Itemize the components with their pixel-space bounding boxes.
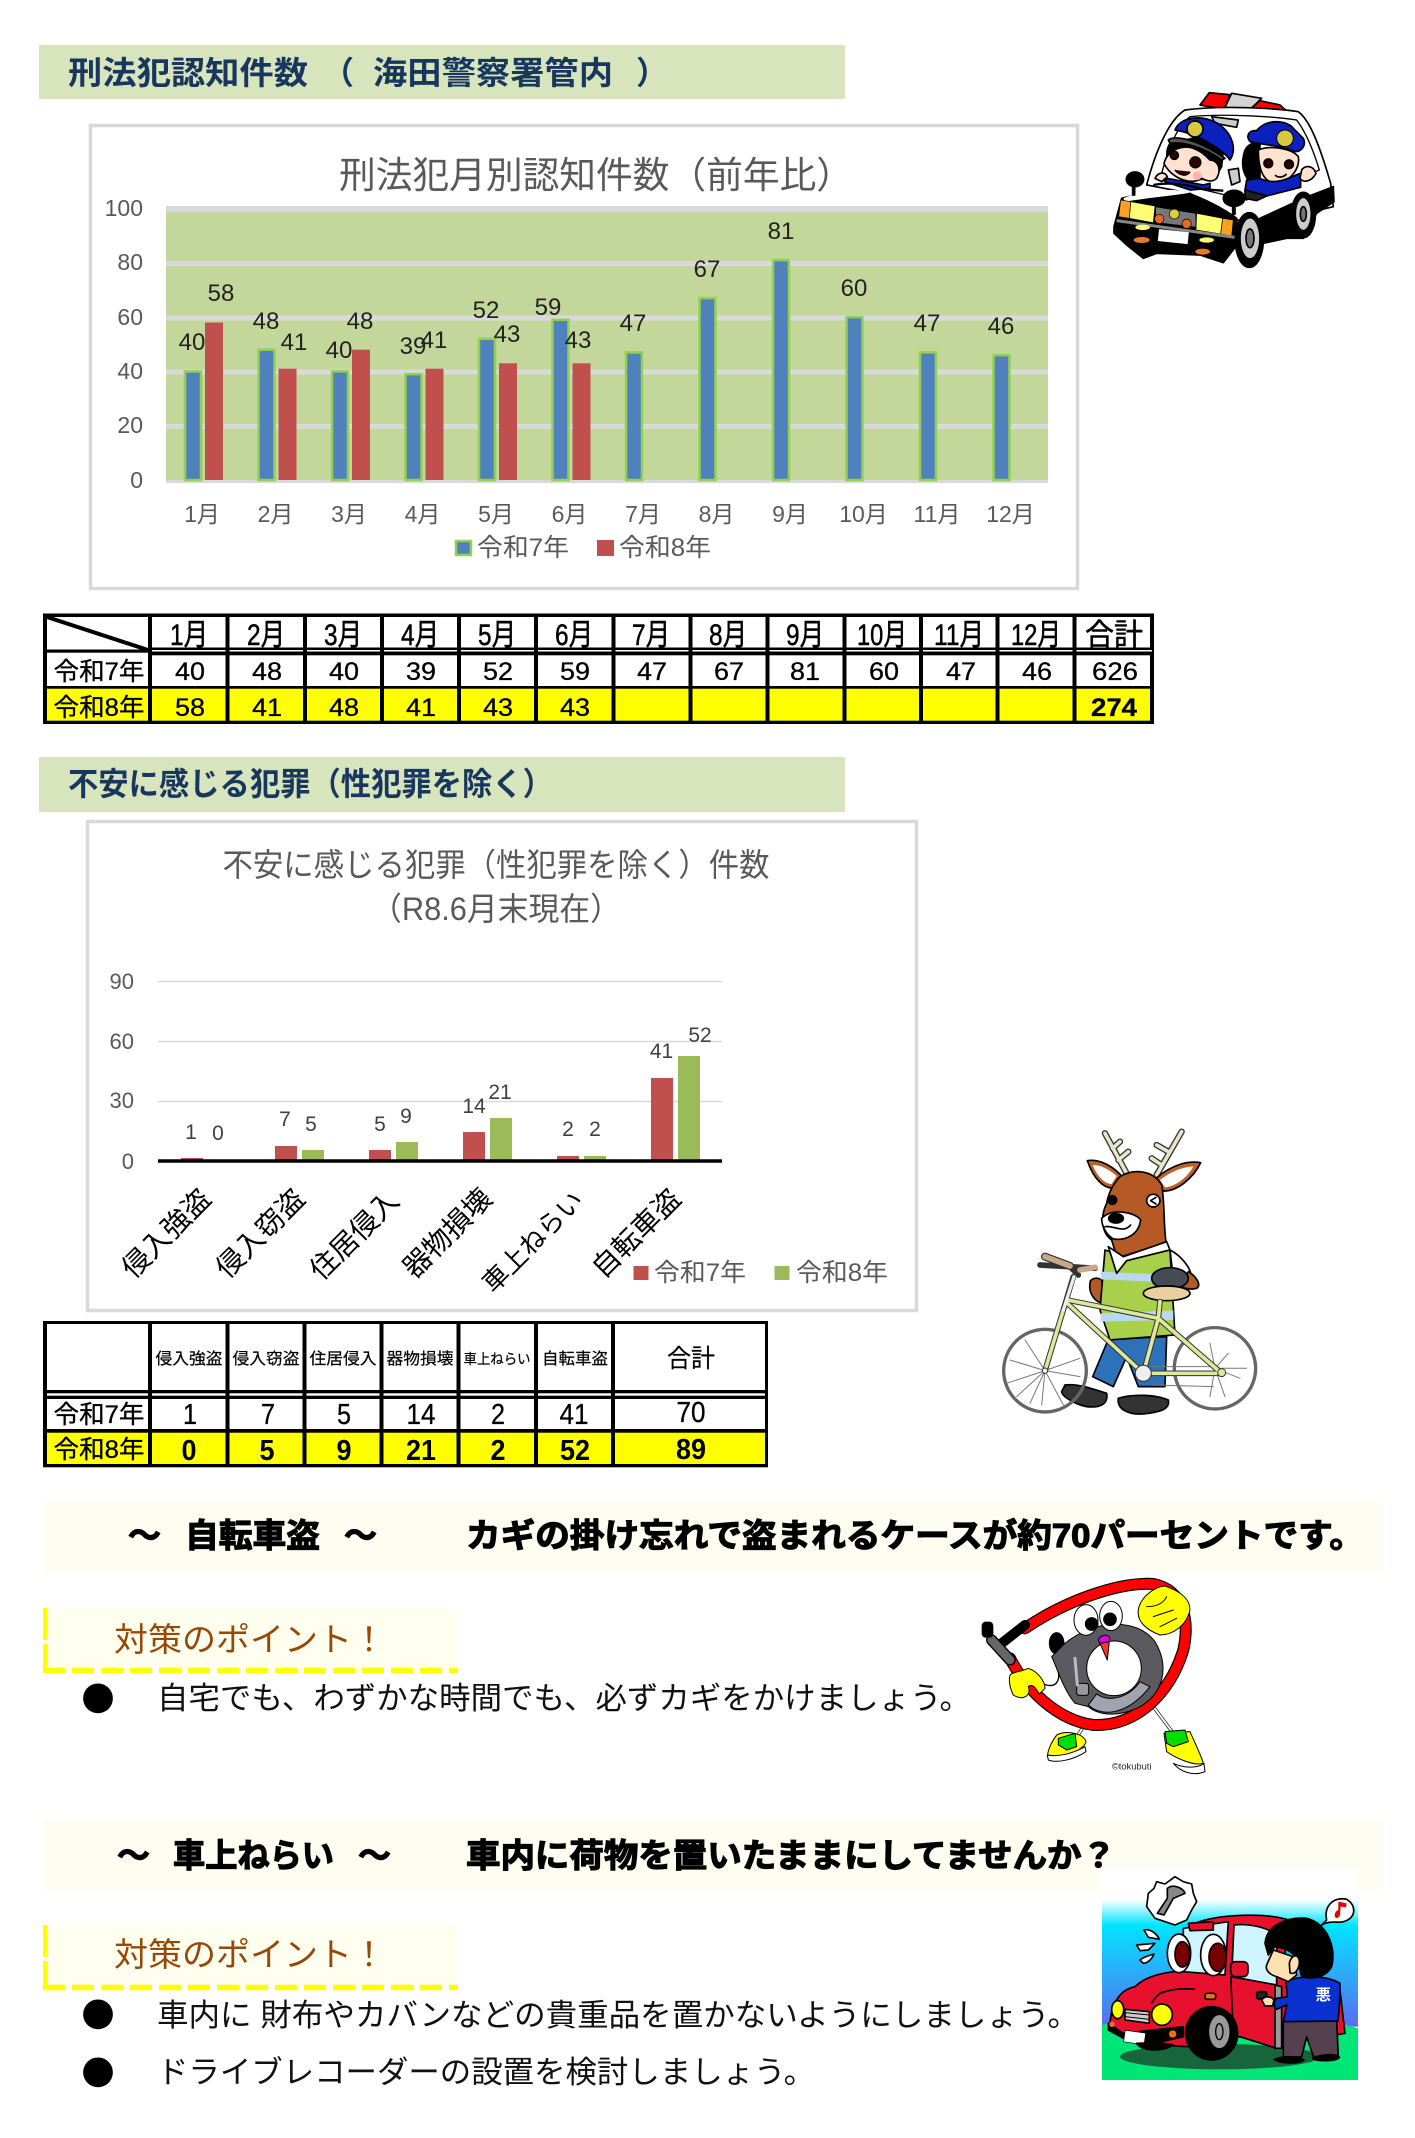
table row: 令和8年: 48 [329, 694, 359, 722]
table row: 令和7年: 40 [329, 658, 359, 686]
table header labels: 合計 [667, 1345, 715, 1373]
table row: 令和7年: 5 [337, 1399, 351, 1431]
icon: police car with two officers [1114, 93, 1334, 267]
plot area with bars [166, 209, 1048, 482]
month labels: 7月 [625, 501, 661, 527]
panel: monthly bar chart [90, 126, 1078, 588]
data labels: 67 [694, 256, 720, 283]
icon: deer mascot with bicycle [1004, 1132, 1256, 1414]
table row: 令和7年: 46 [1022, 658, 1052, 686]
bullet text: 貴重品 [82, 1989, 1079, 2037]
table row: 令和7年: 41 [560, 1399, 588, 1431]
y axis labels [110, 969, 134, 1174]
callout: 対策のポイント 1 [43, 1608, 458, 1670]
data labels: 41 [281, 329, 307, 356]
heading band: 刑法犯認知件数: （ [322, 55, 354, 91]
table row: 令和8年: 41 [406, 694, 436, 722]
data labels: 47 [620, 310, 646, 337]
table header months: 2月 [247, 619, 285, 652]
table row: 令和7年: 40 [175, 658, 205, 686]
table row: 令和7年: 14 [406, 1399, 436, 1431]
section band: 車上ねらい: ～ [117, 1837, 150, 1874]
bullet text: カギ [82, 1673, 971, 1721]
data labels: 43 [494, 321, 520, 348]
table row: 令和8年: 41 [252, 694, 282, 722]
month labels: 5月 [478, 501, 514, 527]
section band: 自転車盗: 自転車盗 [185, 1517, 320, 1554]
y axis labels: 100 [105, 195, 143, 221]
y axis labels: 90 [110, 969, 134, 994]
data labels: 47 [914, 310, 940, 337]
y axis labels [105, 195, 143, 493]
table row: 令和7年: 令和7年 [54, 1401, 144, 1429]
data labels: 41 [650, 1040, 673, 1063]
table row: 令和7年: 81 [790, 658, 820, 686]
heading band: 刑法犯認知件数: ） [636, 55, 668, 91]
table row: 令和8年 [54, 694, 1137, 722]
y axis labels: 20 [117, 412, 143, 438]
rotated category labels: 住居侵入 [304, 1185, 405, 1286]
bullet text: 貴重品: ● [82, 1989, 114, 2037]
table row: 令和8年: 52 [560, 1435, 590, 1467]
section band: 自転車盗 [43, 1502, 1383, 1572]
table row: 令和8年: 43 [560, 694, 590, 722]
table row: 令和7年: 令和7年 [54, 658, 144, 686]
chart title [222, 847, 770, 927]
table header months: 11月 [934, 619, 984, 652]
data labels [179, 218, 1014, 364]
month labels: 6月 [552, 501, 587, 527]
data labels: 40 [179, 329, 205, 356]
data labels: 59 [535, 294, 561, 321]
table header labels: 侵入窃盗 [232, 1350, 300, 1368]
data labels: 52 [688, 1024, 712, 1047]
data labels: 60 [841, 275, 867, 302]
table header months: 9月 [786, 619, 824, 652]
chart title: 刑法犯月別認知件数（前年比） [339, 155, 853, 196]
table header labels: 器物損壊 [386, 1350, 454, 1368]
chart frame [88, 822, 916, 1310]
legend: 令和8年 [619, 534, 711, 562]
month labels: 8月 [699, 501, 734, 527]
data labels: 14 [462, 1095, 486, 1118]
section band: 車上ねらい: 車上ねらい [173, 1837, 334, 1874]
table row: 令和7年: 60 [869, 658, 899, 686]
data labels: 21 [488, 1081, 512, 1104]
data labels: 58 [208, 280, 234, 307]
month labels: 9月 [772, 501, 808, 527]
rotated category labels: 自転車盗 [586, 1183, 687, 1284]
table header months: 合計 [1085, 619, 1143, 652]
table header months: 6月 [555, 619, 593, 652]
y axis labels: 0 [130, 467, 143, 493]
table header months [170, 619, 1143, 652]
month labels: 1月 [184, 501, 220, 527]
data labels: 40 [326, 337, 352, 364]
rotated category labels [116, 1183, 687, 1298]
bullet text: 貴重品: 車内に 財布やカバンなどの貴重品を置かないようにしましょう。 [157, 1998, 1079, 2033]
table header labels: 住居侵入 [310, 1350, 376, 1368]
heading band: 不安に感じる犯罪 [39, 757, 845, 812]
rotated category labels: 車上ねらい [476, 1185, 589, 1298]
bullet text: ドライブレコーダー: ● [82, 2047, 114, 2095]
table header months: 7月 [632, 619, 670, 652]
chart title: （R8.6月末現在） [371, 891, 621, 927]
table row: 令和7年: 59 [560, 658, 590, 686]
table row: 令和7年: 48 [252, 658, 282, 686]
icon: car break-in illustration: 悪 [1316, 1987, 1331, 2004]
table row: 令和8年: 5 [260, 1435, 274, 1467]
month labels: 3月 [331, 501, 367, 527]
month labels: 10月 [839, 501, 888, 527]
month labels: 11月 [914, 501, 960, 527]
icon: bicycle lock character: ©tokubuti [1112, 1761, 1151, 1771]
y axis labels: 40 [117, 358, 143, 384]
data labels: 46 [988, 313, 1014, 340]
table row: 令和8年: 令和8年 [54, 1436, 144, 1464]
rotated category labels: 侵入強盗 [116, 1183, 217, 1284]
y axis labels: 0 [122, 1149, 134, 1174]
table row: 令和8年: 9 [336, 1435, 352, 1467]
data labels: 43 [565, 327, 591, 354]
table header months: 4月 [401, 619, 439, 652]
legend: 令和8年 [796, 1259, 888, 1287]
table row: 令和8年: 43 [483, 694, 513, 722]
callout: 対策のポイント 2 [43, 1925, 458, 1988]
data labels: 48 [347, 308, 373, 335]
table row: 令和8年 [54, 1434, 706, 1467]
bullet text: ドライブレコーダー: ドライブレコーダーの設置を検討しましょう。 [157, 2055, 815, 2090]
table row: 令和7年: 52 [483, 658, 513, 686]
y axis labels: 80 [117, 249, 143, 275]
data labels [185, 1024, 712, 1145]
rotated category labels: 侵入窃盗 [210, 1183, 311, 1284]
table row: 令和7年: 67 [714, 658, 744, 686]
y axis labels: 60 [110, 1029, 134, 1054]
table header months: 12月 [1011, 619, 1061, 652]
y axis labels: 60 [117, 304, 143, 330]
section band: 自転車盗: ～ [344, 1517, 377, 1554]
chart title: 不安に感じる犯罪（性犯罪を除く）件数 [222, 847, 770, 883]
table row: 令和8年: 令和8年 [54, 694, 144, 722]
table row: 令和7年 [54, 658, 1138, 686]
data labels: 9 [400, 1105, 412, 1128]
month labels: 12月 [986, 501, 1035, 527]
data labels: 39 [400, 333, 426, 360]
table row: 令和7年: 626 [1092, 658, 1138, 686]
table row: 令和7年: 2 [491, 1399, 505, 1431]
section band: 自転車盗: ～ [128, 1517, 161, 1554]
y axis labels: 30 [110, 1088, 134, 1113]
table row: 令和7年: 47 [637, 658, 667, 686]
table row: 令和8年: 2 [490, 1435, 506, 1467]
table row: 令和8年: 21 [406, 1435, 436, 1467]
section band: 車上ねらい: ～ [358, 1837, 391, 1874]
heading band: 不安に感じる犯罪: 不安に感じる犯罪（性犯罪を除く） [68, 766, 553, 802]
heading band: 刑法犯認知件数: 刑法犯認知件数 [68, 55, 308, 91]
legend: 令和7年 [654, 1259, 746, 1287]
legend [456, 534, 711, 562]
section band: 車上ねらい [43, 1821, 1383, 1890]
table header labels: 侵入強盗 [156, 1350, 222, 1368]
table row: 令和7年: 1 [183, 1399, 197, 1431]
data labels: 7 [279, 1108, 291, 1131]
table row: 令和8年: 89 [676, 1434, 706, 1466]
chart frame [90, 126, 1078, 588]
rotated category labels: 器物損壊 [397, 1183, 498, 1284]
bars [158, 1056, 722, 1161]
bullet text: カギ: ● [82, 1673, 114, 1721]
legend: 令和7年 [477, 534, 569, 562]
data labels: 2 [589, 1118, 601, 1141]
table header months: 1月 [170, 619, 208, 652]
data table: monthly counts [43, 614, 1154, 724]
bullet text: カギ: 自宅でも、わずかな時間でも、必ずカギをかけましょう。 [157, 1681, 971, 1716]
bullet text: ドライブレコーダー [82, 2047, 815, 2095]
heading band: 刑法犯認知件数 [39, 45, 845, 99]
table header months: 10月 [857, 619, 907, 652]
table header months: 5月 [478, 619, 516, 652]
table row: 令和8年: 58 [175, 694, 205, 722]
gridlines and axis [158, 982, 722, 1102]
table row: 令和7年: 47 [946, 658, 976, 686]
section band: 自転車盗: カギの掛け忘れで盗まれるケースが約70パーセントです。 [466, 1517, 1364, 1554]
table header labels: 車上ねらい [464, 1351, 530, 1367]
table row: 令和7年: 70 [676, 1397, 706, 1429]
table header labels [156, 1345, 715, 1373]
data labels: 81 [768, 218, 794, 245]
table row: 令和7年 [54, 1397, 706, 1431]
legend [634, 1259, 888, 1287]
data labels: 41 [421, 327, 447, 354]
data labels: 48 [253, 308, 279, 335]
data labels: 5 [305, 1113, 317, 1136]
table row: 令和8年: 274 [1091, 694, 1137, 722]
icon: bicycle lock character [982, 1584, 1205, 1774]
table row: 令和7年: 39 [406, 658, 436, 686]
table header months: 3月 [324, 619, 362, 652]
icon: car break-in illustration [1102, 1868, 1358, 2080]
callout: 対策のポイント 1: 対策のポイント！ [114, 1621, 386, 1658]
table row: 令和8年: 0 [182, 1435, 196, 1467]
data labels: 0 [212, 1122, 224, 1145]
heading band: 刑法犯認知件数: 海田警察署管内 [373, 55, 613, 91]
data labels: 52 [473, 297, 499, 324]
month labels: 4月 [405, 501, 440, 527]
month labels [184, 501, 1035, 527]
table row: 令和7年: 7 [261, 1399, 275, 1431]
panel: anxiety crime bar chart [88, 822, 916, 1310]
data labels: 1 [185, 1121, 197, 1144]
month labels: 2月 [258, 501, 293, 527]
table header labels: 自転車盗 [542, 1350, 608, 1368]
data labels: 5 [374, 1113, 386, 1136]
data table: crime types [43, 1321, 768, 1467]
data labels: 2 [562, 1118, 574, 1141]
callout: 対策のポイント 2: 対策のポイント！ [114, 1936, 386, 1973]
section band: 車上ねらい: 車内に荷物を置いたままにしてませんか？ [466, 1837, 1116, 1874]
table header months: 8月 [709, 619, 747, 652]
